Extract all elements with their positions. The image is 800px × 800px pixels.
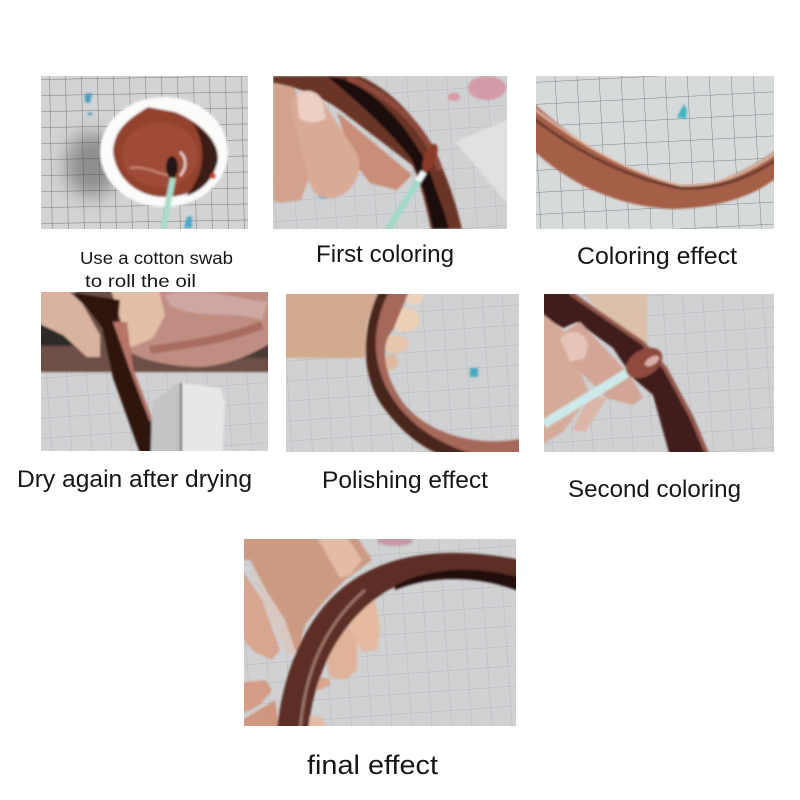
caption: first coloring: First coloring <box>316 241 454 268</box>
caption: coloring effect: Coloring effect <box>577 243 737 270</box>
caption: polishing effect: Polishing effect <box>322 467 488 494</box>
panel: coloring effect <box>536 76 774 229</box>
panel: polishing effect <box>286 294 519 452</box>
caption: second coloring: Second coloring <box>568 476 741 503</box>
panel: dry again after drying <box>41 292 268 451</box>
caption: dry again after drying: Dry again after drying <box>17 466 252 493</box>
panel: final effect <box>244 539 516 726</box>
panel: cotton swab in bowl of oil <box>41 76 248 229</box>
panel: second coloring <box>544 294 774 452</box>
caption: use a cotton swab <box>80 248 233 291</box>
caption: final effect: final effect <box>307 750 439 780</box>
caption: use a cotton swab: Use a cotton swab <box>80 248 233 268</box>
panel: first coloring <box>273 76 507 229</box>
caption: use a cotton swab: to roll the oil <box>85 271 196 291</box>
